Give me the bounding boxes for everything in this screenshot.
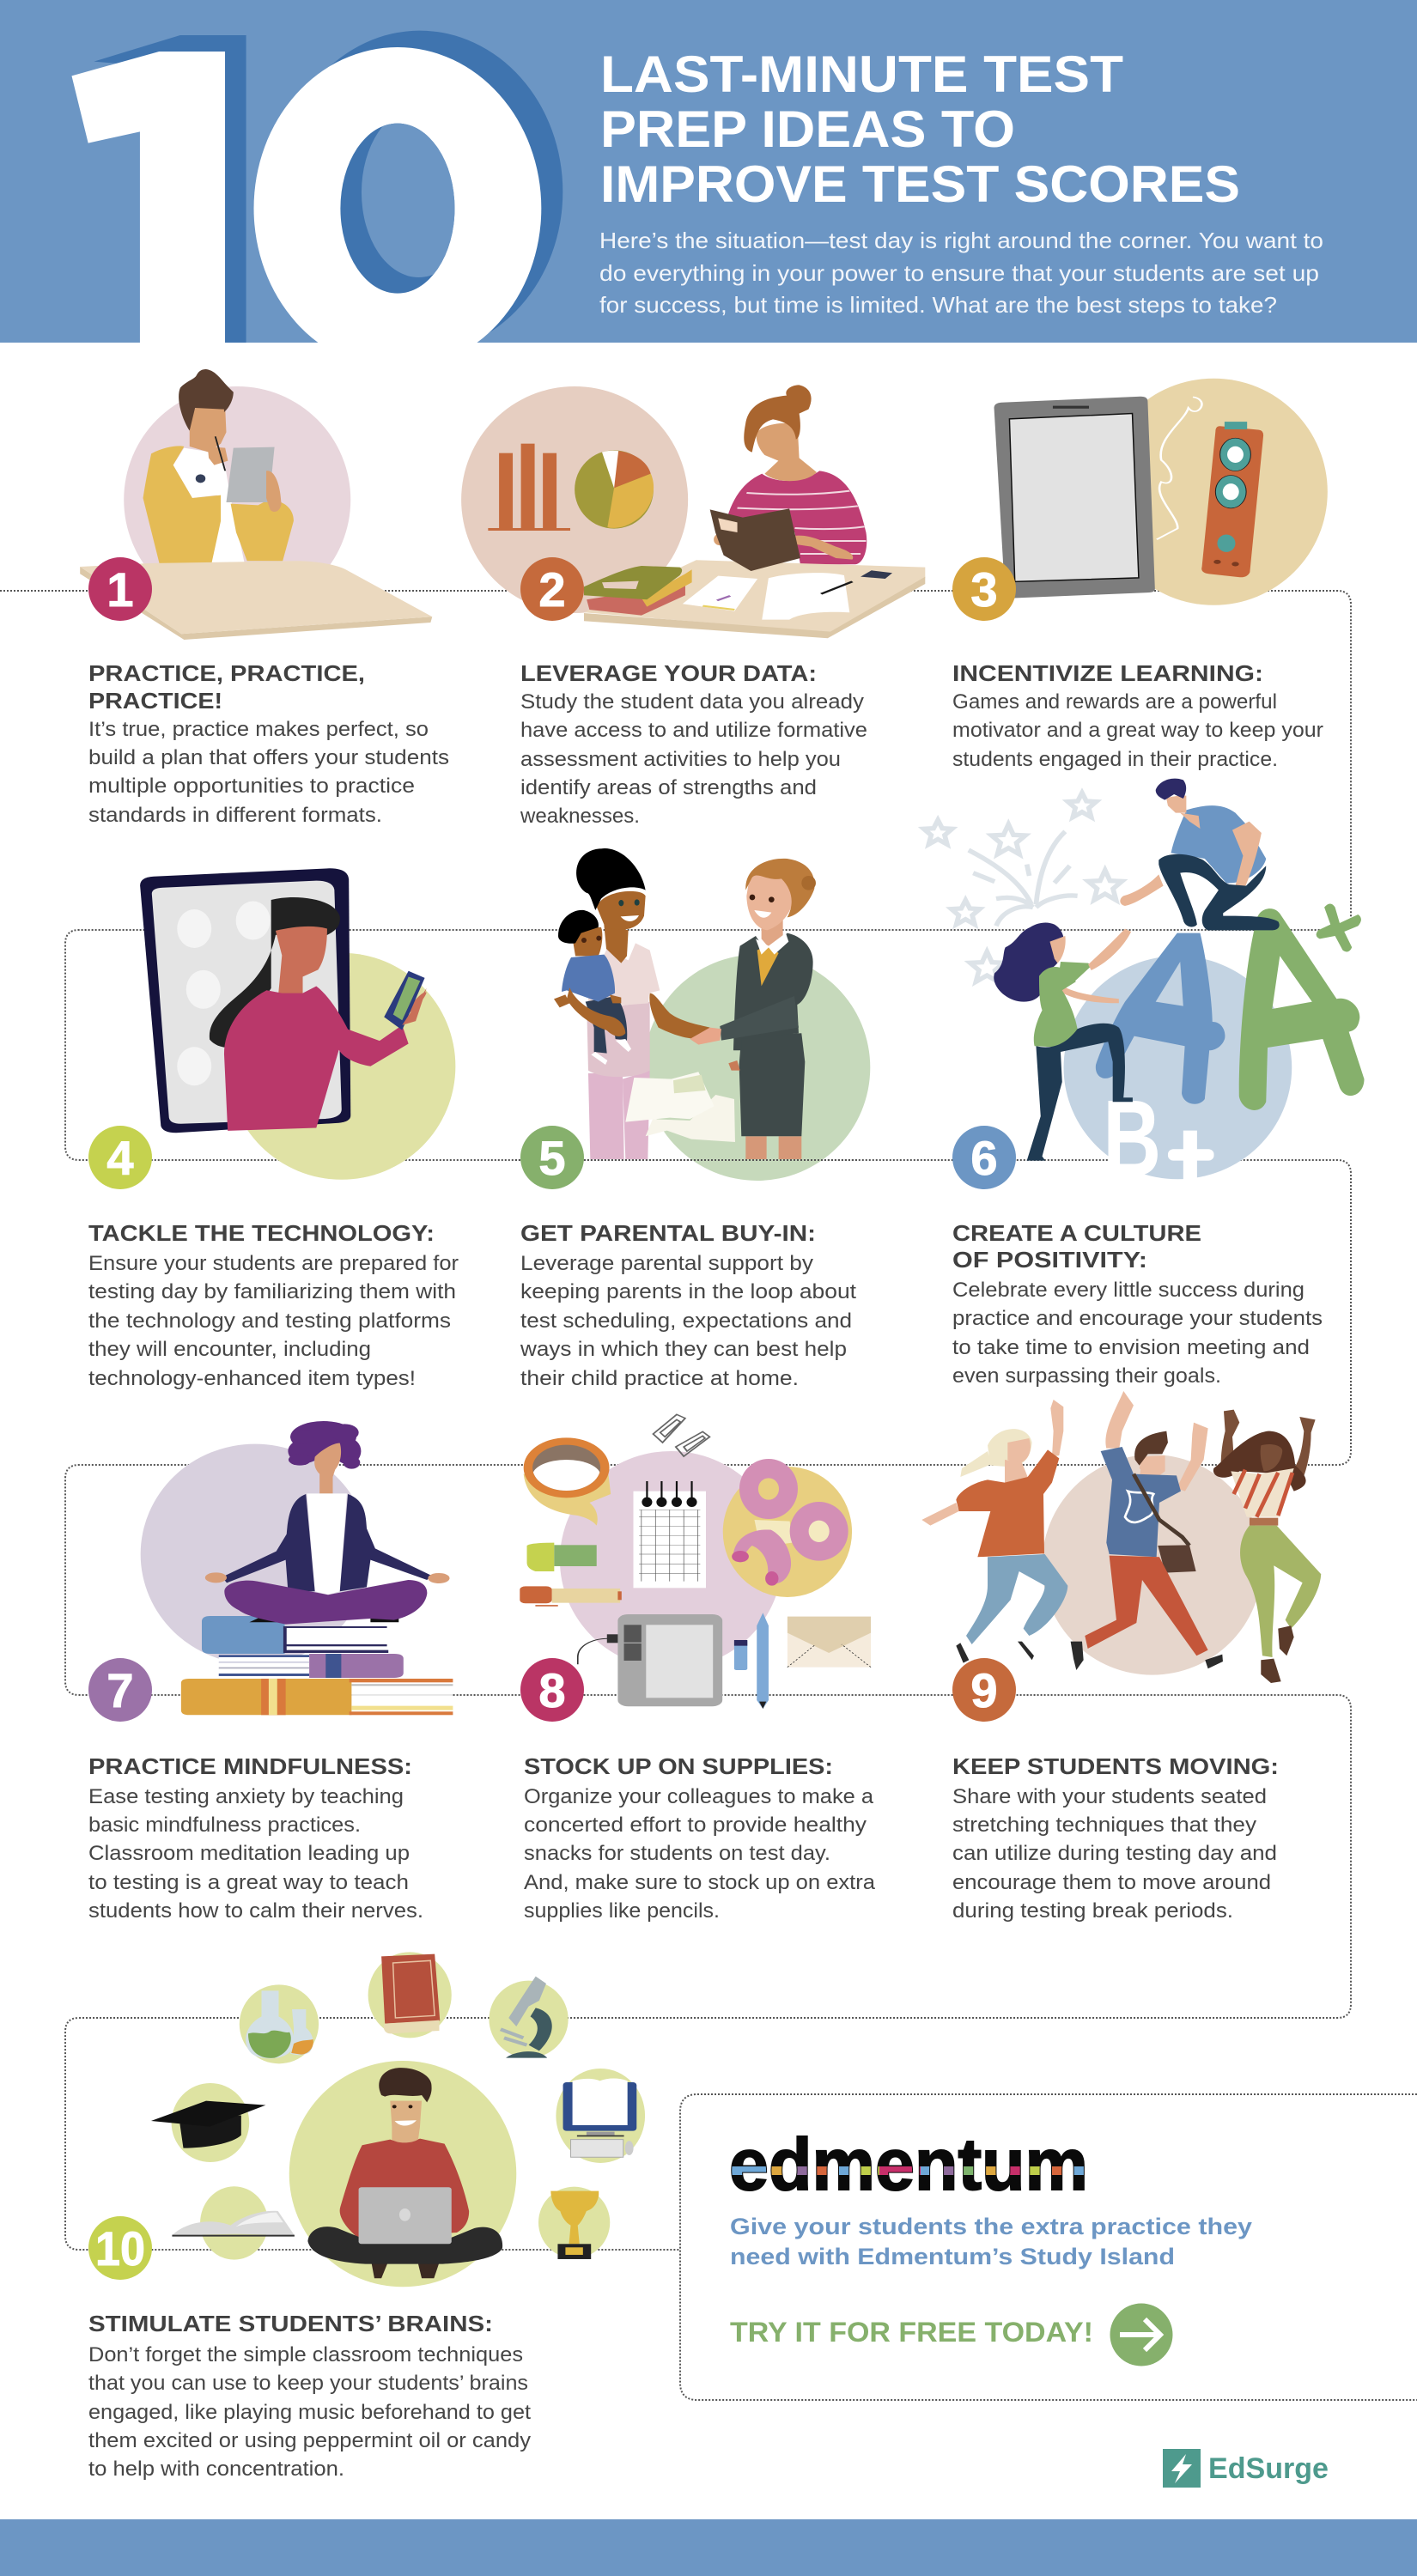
paper clips <box>654 1414 709 1456</box>
text block 5: keeping parents in the loop about <box>520 1280 856 1303</box>
flasks <box>246 1990 313 2058</box>
footer band <box>0 2519 1417 2576</box>
pie chart <box>575 450 654 529</box>
text block 1: It’s true, practice makes perfect, so <box>88 718 429 741</box>
tagline <box>730 2214 1252 2269</box>
try it call to action: TRY IT FOR FREE TODAY! <box>730 2317 1093 2348</box>
open books <box>625 1072 735 1142</box>
step badge 6: 6 <box>970 1131 998 1185</box>
step badge 3 <box>952 557 1016 621</box>
step badge 4: 4 <box>106 1131 134 1185</box>
text block 7: basic mindfulness practices. <box>88 1814 361 1837</box>
dotted connector path <box>0 591 1351 2250</box>
marker <box>527 1543 597 1571</box>
parent holding child <box>554 848 710 1159</box>
arrow button <box>1110 2303 1173 2366</box>
donuts <box>732 1459 848 1586</box>
text block 5: ways in which they can best help <box>520 1338 847 1361</box>
text block 6: OF POSITIVITY: <box>952 1247 1147 1273</box>
fireworks and stars <box>924 793 1122 981</box>
student with striped shirt <box>1213 1410 1321 1683</box>
text block 7: Ease testing anxiety by teaching <box>88 1785 404 1808</box>
text block 3: motivator and a great way to keep your <box>952 719 1323 742</box>
header band <box>0 0 1417 369</box>
text block 5: test scheduling, expectations and <box>520 1309 852 1333</box>
text block 9: during testing break periods. <box>952 1899 1233 1923</box>
text block 5 <box>520 1220 856 1390</box>
text block 10: them excited or using peppermint oil or candy <box>88 2429 531 2452</box>
text block 4: technology-enhanced item types! <box>88 1367 416 1390</box>
text block 2: Study the student data you already <box>520 690 864 714</box>
text block 10: to help with concentration. <box>88 2458 344 2481</box>
man reaching down <box>1120 779 1280 930</box>
text block 9: can utilize during testing day and <box>952 1842 1277 1865</box>
text block 9: KEEP STUDENTS MOVING: <box>952 1753 1279 1779</box>
letter B+ white: B <box>1103 1077 1161 1199</box>
text block 3: Games and rewards are a powerful <box>952 690 1277 714</box>
tablet <box>994 397 1155 598</box>
illustration 7: meditating person on books <box>141 1421 453 1715</box>
text block 3: INCENTIVIZE LEARNING: <box>952 660 1263 686</box>
music player <box>1201 422 1263 577</box>
letter A+ green <box>1239 903 1365 1110</box>
text block 4: the technology and testing platforms <box>88 1309 451 1333</box>
text block 6: Celebrate every little success during <box>952 1279 1304 1302</box>
text block 6: to take time to envision meeting and <box>952 1336 1310 1359</box>
text block 7 <box>88 1753 423 1923</box>
dotted line across the green circle <box>515 1159 859 1161</box>
intro text: for success, but time is limited. What are the best steps to take? <box>599 292 1277 318</box>
text block 5: their child practice at home. <box>520 1367 799 1390</box>
pencil <box>520 1586 622 1606</box>
tape roll <box>524 1437 611 1526</box>
step badge 1: 1 <box>106 562 134 617</box>
text block 2: assessment activities to help you <box>520 748 841 771</box>
text block 8: concerted effort to provide healthy <box>524 1814 867 1837</box>
step badge 8 <box>520 1658 584 1722</box>
text block 7: to testing is a great way to teach <box>88 1871 409 1894</box>
call to action panel <box>680 2094 1417 2400</box>
illustration 4: woman with phone emerging from screen <box>140 868 455 1180</box>
meditating figure <box>205 1421 450 1625</box>
title: PREP IDEAS TO <box>600 100 1015 158</box>
illustration 3: tablet and game controller <box>994 379 1328 605</box>
illustration 5: parent and teacher handshake <box>554 848 870 1181</box>
text block 8: Organize your colleagues to make a <box>524 1785 874 1808</box>
text block 9 <box>952 1753 1279 1923</box>
illustration 1: student with clipboard at desk <box>80 369 432 640</box>
book stack <box>181 1616 453 1715</box>
text block 5: Leverage parental support by <box>520 1252 813 1275</box>
text block 9: stretching techniques that they <box>952 1814 1256 1837</box>
title <box>600 46 1240 213</box>
title: IMPROVE TEST SCORES <box>600 155 1240 213</box>
text block 7: students how to calm their nerves. <box>88 1899 423 1923</box>
drawing tablet <box>607 1614 722 1706</box>
step badge 6 <box>952 1126 1016 1189</box>
open book <box>172 2211 295 2237</box>
cord <box>1157 397 1201 539</box>
text block 6 <box>952 1220 1323 1388</box>
step badge 1 <box>88 557 152 621</box>
text block 6: CREATE A CULTURE <box>952 1220 1201 1246</box>
intro text: Here’s the situation—test day is right around the corner. You want to <box>599 228 1323 253</box>
background circles <box>172 1952 645 2287</box>
step badge 4 <box>88 1126 152 1189</box>
step badge 9 <box>952 1658 1016 1722</box>
letter A blue <box>1096 933 1225 1104</box>
text block 4: they will encounter, including <box>88 1338 371 1361</box>
text block 9: encourage them to move around <box>952 1871 1271 1894</box>
text block 6: even surpassing their goals. <box>952 1364 1221 1388</box>
intro text <box>599 228 1323 318</box>
pen <box>757 1613 769 1709</box>
text block 10: Don’t forget the simple classroom techniques <box>88 2343 523 2366</box>
step badge 7 <box>88 1658 152 1722</box>
trophy <box>550 2191 599 2259</box>
illustration 6: students climbing giant grades <box>924 779 1365 1199</box>
bar chart <box>488 444 570 531</box>
step badge 5 <box>520 1126 584 1189</box>
text block 1: standards in different formats. <box>88 804 382 827</box>
student with orange shirt <box>921 1400 1067 1663</box>
text block 10: engaged, like playing music beforehand to get <box>88 2401 531 2424</box>
text block 1 <box>88 660 449 827</box>
edmentum logo <box>731 2136 1085 2191</box>
text block 2 <box>520 660 867 828</box>
text block 2: LEVERAGE YOUR DATA: <box>520 660 817 686</box>
step badge 10: 10 <box>95 2221 145 2275</box>
text block 9: Share with your students seated <box>952 1785 1267 1808</box>
red book <box>381 1954 440 2033</box>
text block 4: TACKLE THE TECHNOLOGY: <box>88 1220 435 1246</box>
text block 4 <box>88 1220 459 1390</box>
intro text: do everything in your power to ensure that your students are set up <box>599 260 1319 286</box>
big number 10 <box>71 31 563 369</box>
text block 8 <box>524 1753 876 1923</box>
text block 3: students engaged in their practice. <box>952 748 1278 771</box>
text block 1: PRACTICE! <box>88 688 222 714</box>
text block 1: multiple opportunities to practice <box>88 775 415 798</box>
tagline: Give your students the extra practice they <box>730 2214 1252 2239</box>
text block 8: supplies like pencils. <box>524 1899 720 1923</box>
text block 1: build a plan that offers your students <box>88 746 449 769</box>
text block 3 <box>952 660 1323 771</box>
text block 4: Ensure your students are prepared for <box>88 1252 459 1275</box>
student with laptop <box>307 2068 502 2278</box>
text block 10 <box>88 2311 531 2481</box>
computer with book on screen <box>563 2079 636 2157</box>
illustration 9: students jumping <box>921 1391 1321 1683</box>
step badge 8: 8 <box>538 1663 566 1717</box>
EdSurge logo: EdSurge <box>1208 2452 1329 2485</box>
step badge 3: 3 <box>970 562 998 617</box>
text block 2: weaknesses. <box>520 805 640 828</box>
text block 7: Classroom meditation leading up <box>88 1842 410 1865</box>
text block 8: snacks for students on test day. <box>524 1842 830 1865</box>
illustration 8: school supplies and donuts <box>520 1414 871 1709</box>
step badge 2: 2 <box>538 562 566 617</box>
envelope <box>788 1617 871 1668</box>
graduation cap <box>151 2101 265 2148</box>
step badge 9: 9 <box>970 1663 998 1717</box>
text block 10: that you can use to keep your students’ brains <box>88 2372 528 2395</box>
notebook <box>634 1481 706 1588</box>
text block 10: STIMULATE STUDENTS’ BRAINS: <box>88 2311 493 2336</box>
step badge 5: 5 <box>538 1131 566 1185</box>
text block 7: PRACTICE MINDFULNESS: <box>88 1753 412 1779</box>
tagline: need with Edmentum’s Study Island <box>730 2244 1175 2269</box>
step badge 2 <box>520 557 584 621</box>
EdSurge logo <box>1163 2449 1329 2488</box>
text block 8: STOCK UP ON SUPPLIES: <box>524 1753 833 1779</box>
student with blue shirt and bag <box>1071 1391 1223 1670</box>
illustration 10: student with laptop and learning icons <box>151 1952 645 2287</box>
text block 1: PRACTICE, PRACTICE, <box>88 660 365 686</box>
edmentum logo: edmentum <box>729 2124 1088 2206</box>
text block 6: practice and encourage your students <box>952 1307 1323 1330</box>
microscope <box>501 1977 552 2058</box>
text block 4: testing day by familiarizing them with <box>88 1280 456 1303</box>
text block 8: And, make sure to stock up on extra <box>524 1871 876 1894</box>
illustration 2: teacher reviewing data <box>461 385 925 638</box>
teacher in suit <box>690 859 816 1159</box>
text block 5: GET PARENTAL BUY-IN: <box>520 1220 816 1246</box>
step badge 7: 7 <box>106 1663 134 1717</box>
title: LAST-MINUTE TEST <box>600 46 1123 103</box>
cable <box>578 1638 608 1664</box>
text block 2: have access to and utilize formative <box>520 719 867 742</box>
woman climbing <box>994 922 1133 1161</box>
text block 2: identify areas of strengths and <box>520 776 817 799</box>
